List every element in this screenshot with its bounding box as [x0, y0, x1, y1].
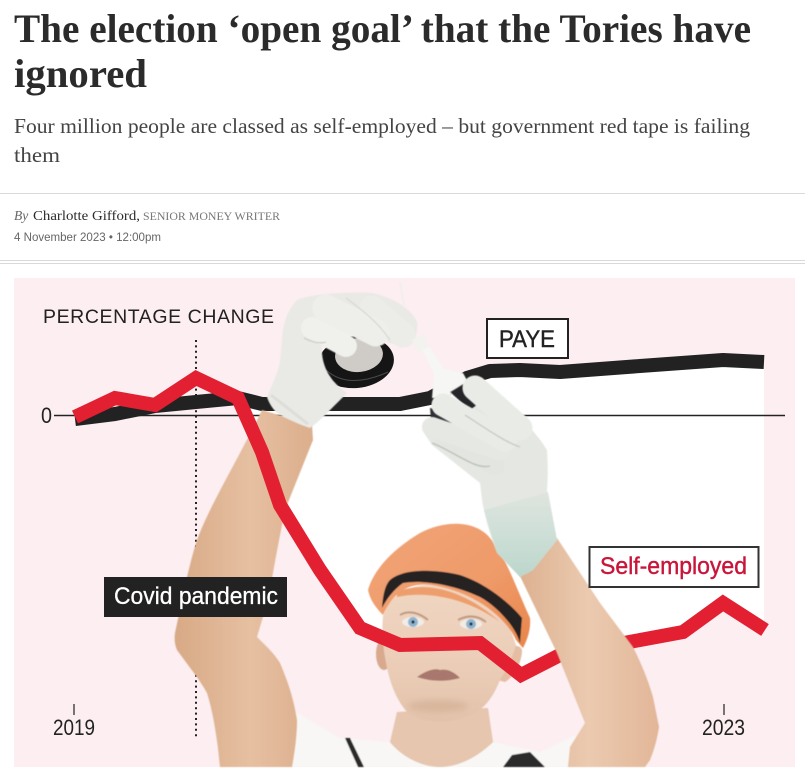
rubber ring [315, 332, 397, 392]
date: 4 November 2023 • 12:00pm [14, 232, 161, 244]
year label: 2023: 2023 [702, 715, 745, 740]
PAYE line [75, 360, 764, 419]
Covid pandemic label [104, 577, 287, 617]
subtitle: them [14, 143, 60, 167]
left glove [267, 293, 417, 428]
Self-employed label [590, 547, 758, 587]
man: t-shirt [290, 712, 590, 767]
white gap between the two lines [238, 360, 764, 675]
byline: SENIOR MONEY WRITER [143, 209, 280, 223]
title: ignored [14, 51, 147, 96]
right arm [518, 538, 659, 767]
right glove [422, 388, 557, 577]
left arm [175, 410, 313, 767]
byline: Charlotte Gifford, [33, 209, 140, 224]
year label: 2019: 2019 [53, 715, 95, 740]
PAYE label: PAYE [499, 326, 555, 353]
panel: chart background [14, 278, 795, 767]
subtitle [14, 114, 750, 167]
PAYE label [487, 319, 568, 358]
subtitle: Four million people are classed as self-employed – but government red tape is failing [14, 114, 750, 138]
axis label: 0: 0 [41, 403, 52, 428]
byline [14, 208, 280, 224]
title: The election ‘open goal’ that the Tories have [14, 6, 751, 51]
title [14, 6, 751, 96]
Covid pandemic label: Covid pandemic [114, 583, 278, 610]
dotted marker: Covid pandemic [195, 340, 197, 737]
year label: 2019 [53, 704, 95, 740]
zero axis [54, 414, 785, 416]
man: hard hat [368, 524, 530, 648]
chart heading: PERCENTAGE CHANGE [43, 306, 274, 328]
Self-employed line [75, 378, 765, 675]
Self-employed label: Self-employed [600, 553, 747, 580]
byline: By [14, 208, 28, 223]
man: neck and face [376, 585, 522, 767]
year label: 2023 [702, 704, 745, 740]
tool [400, 282, 483, 428]
